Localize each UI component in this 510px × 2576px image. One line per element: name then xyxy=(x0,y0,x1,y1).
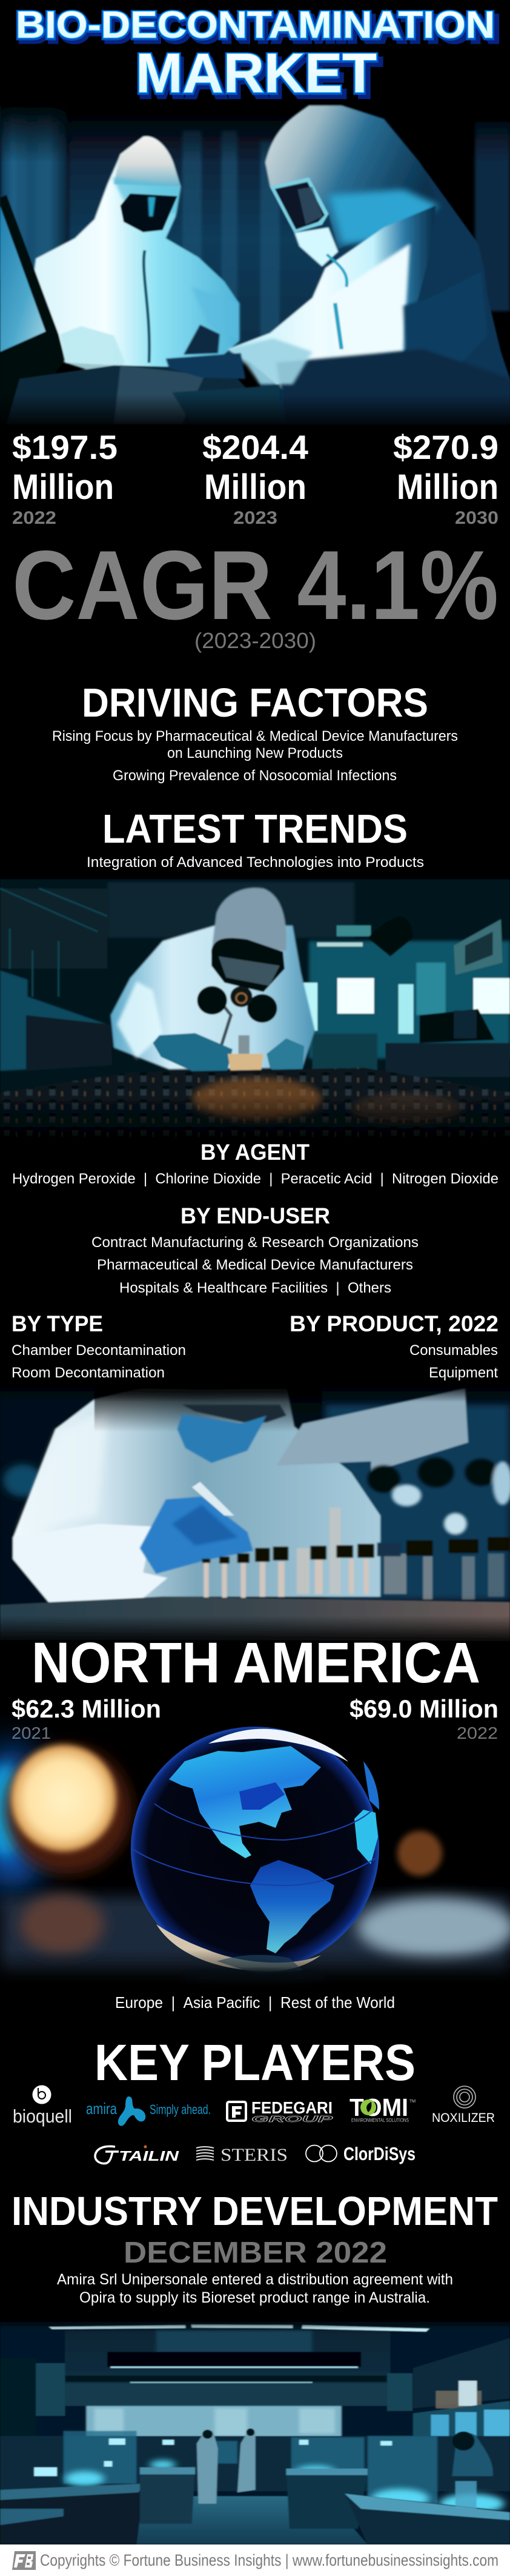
stat: 2022 market size xyxy=(12,428,118,528)
stat: 2030 market size: 2030 xyxy=(455,508,498,528)
title: MARKET xyxy=(136,43,377,105)
heading: latest trends: LATEST TRENDS xyxy=(102,806,408,852)
title: BIO-DECONTAMINATION xyxy=(16,4,495,46)
photo fade into background xyxy=(0,394,510,430)
logo: clordisys: ClorDiSys xyxy=(343,2143,416,2164)
text: end-user segments: Pharmaceutical & Medical Device Manufacturers xyxy=(97,1257,413,1273)
stat: 2022 market size: $197.5 xyxy=(12,428,118,466)
logo: steris: STERIS xyxy=(220,2145,288,2165)
text: product segments: Equipment xyxy=(429,1365,498,1381)
logo: amira xyxy=(86,2096,211,2126)
CAGR period: (2023-2030) xyxy=(194,628,316,653)
logo: noxilizer xyxy=(432,2086,495,2125)
stat: north america 2022: $69.0 Million xyxy=(349,1694,498,1723)
stat: 2023 market size: $204.4 xyxy=(202,428,308,466)
photo: glowing crystal globe showing the Americas xyxy=(0,1727,510,1989)
heading: by agent: BY AGENT xyxy=(200,1140,310,1165)
text: driving factors list: Growing Prevalence of Nosocomial Infections xyxy=(113,768,397,784)
text: development description xyxy=(57,2271,453,2306)
stat: north america 2022 xyxy=(349,1694,498,1742)
logo: bioquell: bioquell xyxy=(13,2106,72,2127)
stat: 2023 market size: 2023 xyxy=(233,508,277,528)
text: type segments xyxy=(12,1342,186,1381)
heading: driving factors: DRIVING FACTORS xyxy=(82,680,428,726)
logo: fedegari group: GROUP xyxy=(251,2114,334,2124)
logo: steris xyxy=(196,2145,288,2165)
text: product segments: Consumables xyxy=(409,1342,498,1359)
heading: by end-user: BY END-USER xyxy=(180,1203,330,1228)
text: agent segments: Hydrogen Peroxide | Chlorine Dioxide | Peracetic Acid | Nitrogen Dioxide xyxy=(12,1171,498,1187)
text: driving factors list: on Launching New Products xyxy=(167,745,343,761)
title: MARKET xyxy=(136,42,377,104)
heading: development date: DECEMBER 2022 xyxy=(124,2236,387,2269)
photo: technician in gas mask working on a circuit board xyxy=(0,879,510,1148)
heading: by product: BY PRODUCT, 2022 xyxy=(290,1311,498,1336)
stat: 2022 market size: 2022 xyxy=(12,508,56,528)
logo: tailin xyxy=(95,2145,179,2164)
logo: fedegari group: FEDEGARI xyxy=(251,2098,333,2117)
text: type segments: Room Decontamination xyxy=(12,1365,165,1381)
stat: 2030 market size: Million xyxy=(397,467,498,507)
text: development description: Opira to supply its Bioreset product range in Australia. xyxy=(79,2289,430,2306)
stat: north america 2021: $62.3 Million xyxy=(12,1694,161,1723)
logo: tomi environmental solutions: ENVIRONMENTAL SOLUTIONS xyxy=(351,2118,409,2123)
logo: noxilizer: NOXILIZER xyxy=(432,2111,495,2125)
logo: bioquell xyxy=(13,2086,72,2127)
title: BIO-DECONTAMINATION xyxy=(16,5,495,47)
stat: north america 2021: 2021 xyxy=(12,1724,51,1742)
stat: 2030 market size: $270.9 xyxy=(393,428,498,466)
title: BIO-DECONTAMINATION xyxy=(18,8,500,50)
text: latest trends item: Integration of Advanced Technologies into Products xyxy=(87,854,424,871)
logo: tailin: TAILIN xyxy=(119,2148,179,2164)
logo: fortune business insights xyxy=(12,2551,36,2570)
stat: 2023 market size xyxy=(202,428,308,528)
text: other regions: Europe | Asia Pacific | Rest of the World xyxy=(115,1993,395,2012)
text: type segments: Chamber Decontamination xyxy=(12,1342,186,1359)
footer bar xyxy=(0,2544,510,2576)
heading: north america: NORTH AMERICA xyxy=(31,1631,480,1695)
text: end-user segments xyxy=(91,1234,419,1296)
logo: amira: Simply ahead. xyxy=(150,2102,211,2117)
logo: fedegari group xyxy=(227,2098,334,2124)
logo: clordisys xyxy=(306,2143,416,2164)
photo: scientist in blue gloves handling test tubes xyxy=(0,1383,510,1643)
heading: by type: BY TYPE xyxy=(12,1311,103,1336)
text: end-user segments: Contract Manufacturing & Research Organizations xyxy=(91,1234,419,1251)
stat: north america 2022: 2022 xyxy=(457,1724,498,1742)
photo: two scientists in protective suits at a keyboard xyxy=(0,103,510,424)
stat: north america 2021 xyxy=(12,1694,161,1742)
logo: tomi environmental solutions: TOMI xyxy=(349,2093,408,2121)
heading: key players: KEY PLAYERS xyxy=(94,2034,416,2091)
text: product segments xyxy=(409,1342,498,1381)
title xyxy=(16,4,500,109)
logo: tomi environmental solutions: TM xyxy=(409,2099,416,2104)
text: driving factors list xyxy=(52,728,458,784)
text: development description: Amira Srl Unipersonale entered a distribution agreement with xyxy=(57,2271,453,2288)
stat: 2023 market size: Million xyxy=(204,467,306,507)
photo: laboratory interior with glass cabinets xyxy=(0,2320,510,2544)
stat: 2030 market size xyxy=(393,428,498,528)
logo: amira: amira xyxy=(86,2099,117,2118)
text: driving factors list: Rising Focus by Pharmaceutical & Medical Device Manufacturers xyxy=(52,728,458,744)
title: MARKET xyxy=(138,47,382,109)
text: end-user segments: Hospitals & Healthcare Facilities | Others xyxy=(119,1280,391,1296)
stat: 2022 market size: Million xyxy=(12,467,114,507)
